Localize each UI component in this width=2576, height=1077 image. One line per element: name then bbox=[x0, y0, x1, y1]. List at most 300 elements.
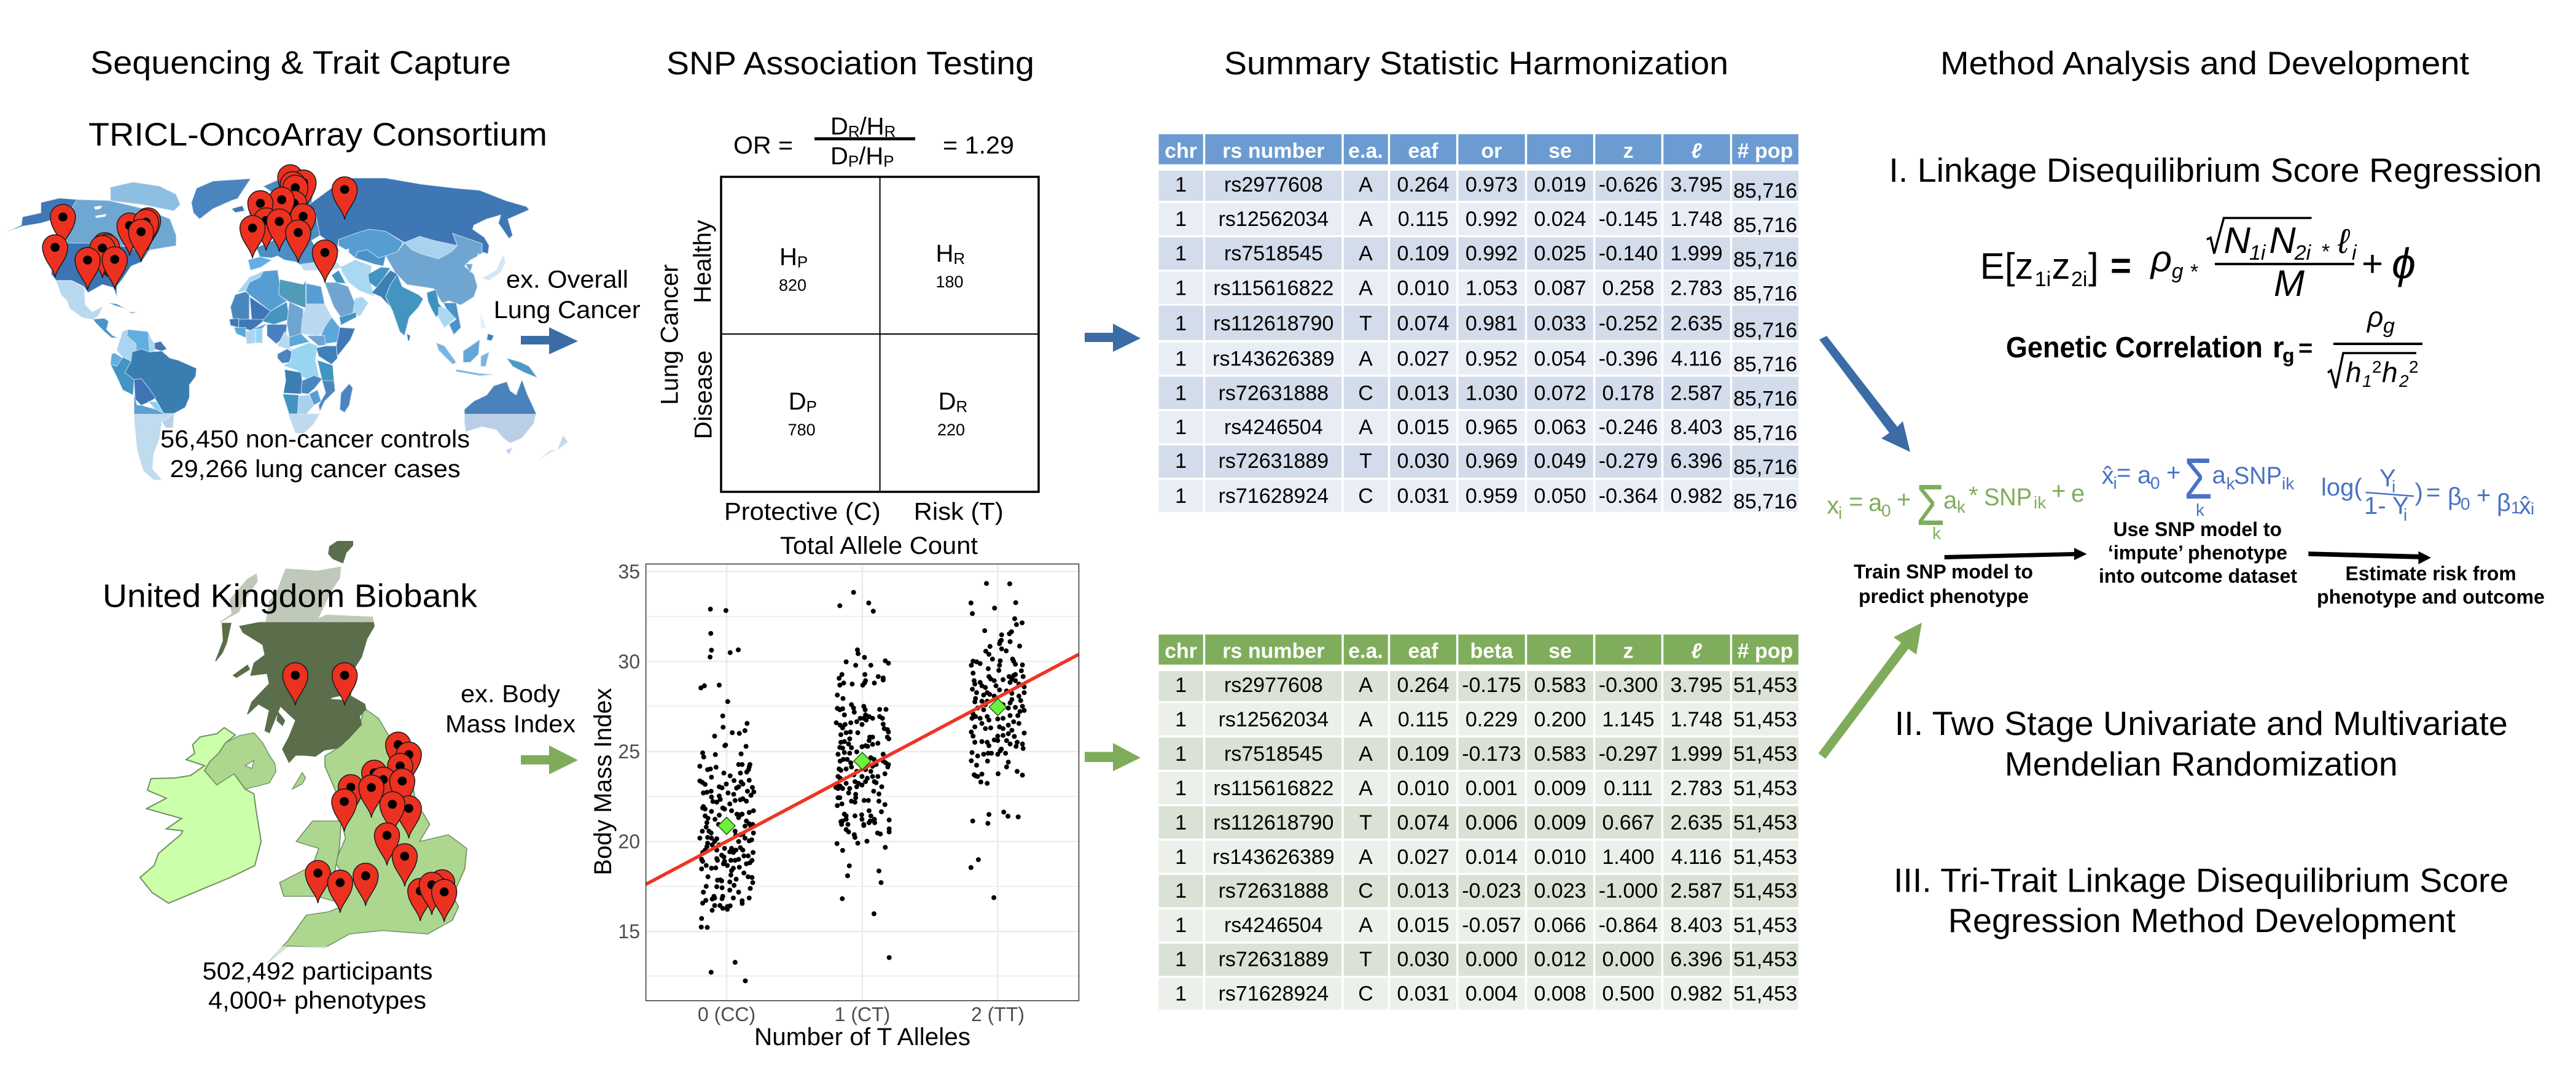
location pins: UK bbox=[283, 663, 457, 922]
row 5: 1 bbox=[1175, 811, 1187, 834]
white text backdrops bbox=[0, 565, 584, 622]
cell: healthy protective: P bbox=[797, 253, 808, 271]
heading: method II bbox=[1895, 704, 2508, 783]
equation: genetic correlation: = bbox=[2298, 335, 2313, 362]
row 8: 0.066 bbox=[1534, 914, 1587, 937]
row 3 bbox=[1175, 242, 1797, 271]
row 9: rs72631889 bbox=[1219, 449, 1329, 473]
row 3: A bbox=[1359, 742, 1373, 766]
equation: genetic correlation: 2 bbox=[2372, 357, 2382, 376]
row 10: C bbox=[1358, 484, 1373, 508]
row 8: -0.057 bbox=[1462, 914, 1521, 937]
row 2: 0.992 bbox=[1466, 208, 1518, 231]
location pins: Europe and Asia bbox=[240, 165, 357, 282]
row 3: 0.992 bbox=[1466, 242, 1518, 265]
heading: Method Analysis and Development: Method Analysis and Development bbox=[1940, 45, 2469, 82]
header row: eaf bbox=[1408, 640, 1438, 663]
row 9: 6.396 bbox=[1670, 948, 1723, 971]
formula: logistic regression: 1- Y bbox=[2364, 492, 2409, 519]
row 4: 2.783 bbox=[1670, 777, 1723, 800]
text: sample counts: 29,266 lung cancer cases bbox=[170, 456, 461, 483]
row 7: 51,453 bbox=[1733, 879, 1797, 903]
row 2: rs12562034 bbox=[1219, 208, 1329, 231]
row 5: 0.667 bbox=[1602, 811, 1655, 834]
formula: logistic regression: x̂ bbox=[2519, 492, 2531, 519]
row 5: 0.074 bbox=[1397, 312, 1450, 335]
equation: genetic correlation: Genetic Correlation bbox=[2006, 332, 2263, 364]
row 5: rs112618790 bbox=[1213, 312, 1333, 335]
text: sample counts bbox=[160, 426, 470, 483]
step text: impute phenotype: ‘impute’ phenotype bbox=[2108, 542, 2287, 564]
row 8: rs4246504 bbox=[1224, 416, 1323, 439]
row 10: rs71628924 bbox=[1219, 982, 1329, 1006]
row 6: 0.054 bbox=[1534, 347, 1587, 370]
formula: imputed phenotype: i bbox=[2113, 473, 2117, 492]
formula: logistic regression: log( bbox=[2321, 474, 2362, 501]
row 5: 0.009 bbox=[1534, 811, 1587, 834]
table: lung cancer summary statistics bbox=[1158, 132, 1798, 513]
row 9: rs72631889 bbox=[1219, 948, 1329, 971]
row 1: 0.583 bbox=[1534, 674, 1587, 697]
row 10 bbox=[1175, 484, 1797, 513]
y axis ticks: 30 bbox=[618, 651, 640, 673]
cell: disease protective: D bbox=[789, 388, 806, 415]
panel: SNP contingency table bbox=[657, 113, 1039, 559]
Africa, Europe, Asia, Oceania bbox=[229, 176, 568, 462]
equation: genetic correlation bbox=[2006, 301, 2422, 391]
heading: method III: Regression Method Development bbox=[1948, 901, 2456, 939]
header row: se bbox=[1548, 640, 1572, 663]
row 10: C bbox=[1358, 982, 1373, 1006]
x axis title: Number of T Alleles bbox=[754, 1024, 970, 1051]
formula: logistic regression: = bbox=[2426, 479, 2440, 506]
row 10: 0.008 bbox=[1534, 982, 1587, 1006]
row 2: 0.200 bbox=[1534, 708, 1587, 731]
row 6 bbox=[1175, 846, 1797, 869]
equation: genetic correlation: ρ bbox=[2366, 301, 2383, 333]
text: participants and phenotypes: 502,492 participants bbox=[203, 958, 432, 985]
formula: logistic regression bbox=[2321, 465, 2534, 524]
heading: Summary Statistic Harmonization: Summary Statistic Harmonization bbox=[1224, 45, 1728, 82]
formula: imputed phenotype: + bbox=[2166, 459, 2180, 486]
row 3: rs7518545 bbox=[1224, 242, 1323, 265]
row 4: 0.010 bbox=[1397, 276, 1450, 300]
odds ratio formula: D bbox=[830, 113, 848, 140]
header row: eaf bbox=[1408, 139, 1438, 163]
row 1: -0.626 bbox=[1599, 173, 1658, 196]
row 7: C bbox=[1358, 381, 1373, 405]
row 5 bbox=[1175, 312, 1797, 342]
text: participants and phenotypes bbox=[203, 958, 432, 1014]
equation: expected z product: * bbox=[2322, 240, 2330, 263]
row 2: 0.024 bbox=[1534, 208, 1587, 231]
row 2: 1.748 bbox=[1670, 708, 1723, 731]
row 5: 0.074 bbox=[1397, 811, 1450, 834]
row 10: 0.031 bbox=[1397, 982, 1450, 1006]
row 2: -0.145 bbox=[1599, 208, 1658, 231]
row 7: 1 bbox=[1175, 879, 1187, 903]
row 10: 85,716 bbox=[1733, 490, 1797, 513]
header row: chr bbox=[1165, 139, 1197, 163]
cell: healthy risk: H bbox=[936, 240, 953, 267]
y axis ticks: 20 bbox=[618, 830, 640, 852]
row 5: 0.006 bbox=[1466, 811, 1518, 834]
row 5: 2.635 bbox=[1670, 811, 1723, 834]
formula: imputed phenotype: a bbox=[2137, 462, 2152, 489]
formula: SNP model bbox=[1827, 473, 2085, 543]
row 4: 0.258 bbox=[1602, 276, 1655, 300]
equation: expected z product: i bbox=[2352, 241, 2357, 265]
row 9: 0.000 bbox=[1602, 948, 1655, 971]
row 8: 8.403 bbox=[1670, 416, 1723, 439]
row 10: 0.982 bbox=[1670, 484, 1723, 508]
equation: expected z product: ℓ bbox=[2337, 222, 2351, 260]
odds ratio formula: /H bbox=[859, 142, 883, 169]
equation: genetic correlation: h bbox=[2382, 356, 2398, 388]
row 6: 51,453 bbox=[1733, 846, 1797, 869]
row 3 bbox=[1175, 742, 1797, 766]
y axis labels bbox=[657, 220, 717, 439]
row 7: 0.178 bbox=[1602, 381, 1655, 405]
row 2: 85,716 bbox=[1733, 214, 1797, 237]
cell: healthy protective bbox=[779, 244, 808, 295]
cell: healthy risk: R bbox=[953, 249, 965, 268]
equation: genetic correlation: r bbox=[2273, 332, 2284, 364]
equation: genetic correlation: 1 bbox=[2362, 371, 2372, 391]
row 6: A bbox=[1359, 347, 1373, 370]
step text: estimate risk: Estimate risk from bbox=[2345, 562, 2516, 585]
header row bbox=[1165, 139, 1793, 163]
row 7 bbox=[1175, 879, 1797, 903]
panel: UK Biobank map bbox=[0, 542, 584, 1014]
England and Wales bbox=[267, 708, 467, 963]
equation: expected z product: * bbox=[2190, 260, 2198, 284]
row 5: 51,453 bbox=[1733, 811, 1797, 834]
formula: logistic regression: 0 bbox=[2461, 494, 2470, 513]
y axis labels: Disease bbox=[690, 351, 717, 439]
text: ex. Overall Lung Cancer: ex. Overall bbox=[506, 266, 628, 294]
row 5: -0.252 bbox=[1599, 312, 1658, 335]
row 8: 51,453 bbox=[1733, 914, 1797, 937]
row 4: 0.010 bbox=[1397, 777, 1450, 800]
row 3: 0.109 bbox=[1397, 742, 1450, 766]
row 9: 1 bbox=[1175, 948, 1187, 971]
heading: United Kingdom Biobank: United Kingdom Biobank bbox=[103, 578, 478, 615]
header row: se bbox=[1548, 139, 1572, 163]
row 7: 1.030 bbox=[1466, 381, 1518, 405]
row 2 bbox=[1175, 708, 1797, 731]
equation: expected z product: M bbox=[2274, 263, 2305, 304]
row 4: rs115616822 bbox=[1213, 777, 1333, 800]
y axis ticks: 15 bbox=[618, 920, 640, 943]
heading: method II: Mendelian Randomization bbox=[2005, 745, 2398, 783]
formula: SNP model: k bbox=[1932, 524, 1942, 543]
white arrow label backdrop bbox=[477, 254, 649, 330]
row 9: 0.030 bbox=[1397, 948, 1450, 971]
header row bbox=[1165, 640, 1793, 663]
row 3: -0.297 bbox=[1599, 742, 1658, 766]
equation: expected z product: z bbox=[2051, 246, 2070, 287]
header row: # pop bbox=[1738, 640, 1793, 663]
row 6: 4.116 bbox=[1671, 846, 1722, 869]
heading: TRICL-OncoArray Consortium: TRICL-OncoArray Consortium bbox=[88, 117, 547, 153]
formula: logistic regression: Y bbox=[2379, 465, 2396, 492]
row 8 bbox=[1175, 416, 1797, 445]
cell: disease risk: R bbox=[956, 397, 967, 416]
arrow: UK map to scatter plot bbox=[521, 745, 578, 774]
row 3: 0.583 bbox=[1534, 742, 1587, 766]
header row: z bbox=[1623, 139, 1634, 163]
row 4: 0.111 bbox=[1604, 777, 1653, 800]
row 5: rs112618790 bbox=[1213, 811, 1333, 834]
row 8: 1 bbox=[1175, 914, 1187, 937]
row 2: 1.145 bbox=[1602, 708, 1655, 731]
arrow: train to impute bbox=[1945, 548, 2087, 560]
row 10 bbox=[1175, 982, 1797, 1006]
row 1: 0.019 bbox=[1534, 173, 1587, 196]
Republic of Ireland bbox=[140, 728, 261, 903]
row 6: 0.027 bbox=[1397, 846, 1450, 869]
row 7: -0.023 bbox=[1462, 879, 1521, 903]
y axis labels: Healthy bbox=[689, 220, 716, 303]
table cell backgrounds bbox=[1158, 132, 1798, 513]
row 5: 0.981 bbox=[1466, 312, 1518, 335]
formula: SNP model: Σ bbox=[1916, 473, 1945, 538]
row 3: 1.999 bbox=[1670, 742, 1723, 766]
row 4 bbox=[1175, 276, 1797, 306]
equation: genetic correlation: g bbox=[2282, 344, 2295, 367]
header row: e.a. bbox=[1348, 139, 1383, 163]
row 9 bbox=[1175, 449, 1797, 479]
row 1: A bbox=[1359, 173, 1373, 196]
row 1: 85,716 bbox=[1733, 179, 1797, 203]
row 6: rs143626389 bbox=[1212, 846, 1335, 869]
panel: TRICL-OncoArray world map bbox=[0, 117, 649, 583]
heading: SNP Association Testing: SNP Association Testing bbox=[666, 45, 1034, 82]
header row: # pop bbox=[1738, 139, 1793, 163]
header row: chr bbox=[1165, 640, 1197, 663]
equation: expected z product: ] bbox=[2088, 246, 2099, 287]
row 4: A bbox=[1359, 777, 1373, 800]
location pins: North America bbox=[42, 204, 161, 290]
row 5: T bbox=[1359, 811, 1372, 834]
formula: logistic regression: i bbox=[2403, 505, 2407, 524]
header row: ℓ bbox=[1691, 640, 1702, 663]
odds ratio formula: OR = bbox=[733, 132, 793, 159]
equation: genetic correlation: h bbox=[2346, 356, 2362, 388]
row 9: 0.000 bbox=[1466, 948, 1518, 971]
row 6: 1.400 bbox=[1602, 846, 1655, 869]
equation: expected z product: N bbox=[2269, 220, 2296, 261]
formula: SNP model: + bbox=[2051, 478, 2066, 505]
row 7 bbox=[1175, 381, 1797, 410]
row 7: 85,716 bbox=[1733, 387, 1797, 410]
row 4: A bbox=[1359, 276, 1373, 300]
row 3: 0.025 bbox=[1534, 242, 1587, 265]
row 10: 0.031 bbox=[1397, 484, 1450, 508]
cell: disease risk: D bbox=[939, 388, 956, 415]
row 6: rs143626389 bbox=[1212, 347, 1335, 370]
row 1: 0.973 bbox=[1466, 173, 1518, 196]
x axis ticks: 1 (CT) bbox=[835, 1003, 890, 1025]
formula: imputed phenotype: k bbox=[2227, 474, 2236, 493]
x axis labels bbox=[724, 499, 1004, 559]
formula: logistic regression: i bbox=[2392, 477, 2395, 496]
row 5 bbox=[1175, 811, 1797, 834]
row 9: 0.049 bbox=[1534, 449, 1587, 473]
formula: imputed phenotype: ik bbox=[2282, 474, 2295, 493]
row 9: 0.030 bbox=[1397, 449, 1450, 473]
formula: logistic regression: + bbox=[2476, 482, 2491, 509]
row 7: -1.000 bbox=[1599, 879, 1658, 903]
row 8: 0.015 bbox=[1397, 914, 1450, 937]
row 10: rs71628924 bbox=[1219, 484, 1329, 508]
row 8: -0.246 bbox=[1599, 416, 1658, 439]
row 3: 1.999 bbox=[1670, 242, 1723, 265]
y axis ticks bbox=[618, 561, 640, 943]
text: ex. Body Mass Index: ex. Body bbox=[461, 681, 560, 708]
Northern Ireland, Scotland and islands bbox=[205, 542, 374, 789]
odds ratio formula: = 1.29 bbox=[943, 132, 1014, 159]
equation: genetic correlation: 2 bbox=[2398, 371, 2409, 391]
row 4: 0.001 bbox=[1466, 777, 1518, 800]
formula: SNP model: 0 bbox=[1881, 501, 1891, 520]
row 1: -0.300 bbox=[1599, 674, 1658, 697]
header row: or bbox=[1481, 139, 1502, 163]
row 4: 1 bbox=[1175, 276, 1187, 300]
formula: imputed phenotype: Σ bbox=[2184, 446, 2212, 511]
row 1: rs2977608 bbox=[1224, 674, 1323, 697]
row 3: -0.140 bbox=[1599, 242, 1658, 265]
row 5: T bbox=[1359, 312, 1372, 335]
heading: method III: III. Tri-Trait Linkage Disequilibrium Score bbox=[1894, 861, 2508, 899]
row 2: 1 bbox=[1175, 708, 1187, 731]
row 9: 0.969 bbox=[1466, 449, 1518, 473]
row 6: 0.014 bbox=[1466, 846, 1518, 869]
row 2: 51,453 bbox=[1733, 708, 1797, 731]
arrow: blue table to methods bbox=[1819, 336, 1910, 452]
heading: method II: II. Two Stage Univariate and Multivariate bbox=[1895, 704, 2508, 742]
row 9: 1 bbox=[1175, 449, 1187, 473]
formula: imputed phenotype bbox=[2102, 446, 2295, 519]
scatter points bbox=[700, 583, 1025, 981]
row 6: 0.952 bbox=[1466, 347, 1518, 370]
header row: beta bbox=[1470, 640, 1513, 663]
row 7: rs72631888 bbox=[1219, 879, 1329, 903]
header row: rs number bbox=[1222, 640, 1325, 663]
arrow: impute to estimate bbox=[2308, 551, 2431, 564]
row 8: -0.864 bbox=[1599, 914, 1658, 937]
step text: train model: Train SNP model to bbox=[1854, 561, 2033, 583]
step text: train model bbox=[1854, 561, 2033, 607]
row 4: 0.009 bbox=[1534, 777, 1587, 800]
row 8: 0.063 bbox=[1534, 416, 1587, 439]
row 5: 2.635 bbox=[1670, 312, 1723, 335]
arrow: scatter to green table bbox=[1085, 743, 1141, 771]
row 3: 0.109 bbox=[1397, 242, 1450, 265]
equation: expected z product: ϕ bbox=[2392, 239, 2416, 287]
row 2: 0.229 bbox=[1466, 708, 1518, 731]
formula: logistic regression: ) bbox=[2415, 479, 2423, 506]
y axis title: Body Mass Index bbox=[590, 688, 617, 876]
row 8: rs4246504 bbox=[1224, 914, 1323, 937]
row 8: 8.403 bbox=[1670, 914, 1723, 937]
row 7: 2.587 bbox=[1670, 381, 1723, 405]
formula: SNP model: ik bbox=[2034, 493, 2047, 512]
header row: ℓ bbox=[1691, 139, 1702, 163]
row 7: 2.587 bbox=[1670, 879, 1723, 903]
formula: imputed phenotype: SNP bbox=[2234, 462, 2282, 489]
row 4 bbox=[1175, 777, 1797, 800]
mean diamonds bbox=[718, 699, 1006, 834]
plot frame bbox=[646, 564, 1079, 1001]
regression line bbox=[646, 655, 1079, 884]
equation: genetic correlation: 2 bbox=[2409, 357, 2419, 376]
formula: logistic regression: β bbox=[2497, 489, 2511, 516]
odds ratio formula: D bbox=[830, 142, 848, 169]
row 3: -0.173 bbox=[1462, 742, 1521, 766]
row 5: 1 bbox=[1175, 312, 1187, 335]
formula: imputed phenotype: x̂ bbox=[2102, 462, 2114, 489]
Americas bbox=[7, 179, 251, 480]
row 2: A bbox=[1359, 708, 1373, 731]
y axis labels: Lung Cancer bbox=[657, 264, 684, 405]
text: ex. Body Mass Index bbox=[445, 681, 576, 738]
row 1: -0.175 bbox=[1462, 674, 1521, 697]
row 7: 0.072 bbox=[1534, 381, 1587, 405]
step text: estimate risk bbox=[2317, 562, 2545, 608]
text: sample counts: 56,450 non-cancer controls bbox=[160, 426, 470, 453]
panel: method I LD score regression bbox=[1889, 151, 2542, 391]
equation: expected z product: 1i bbox=[2249, 241, 2266, 265]
row 8: A bbox=[1359, 416, 1373, 439]
row 10: 0.500 bbox=[1602, 982, 1655, 1006]
heading: I. Linkage Disequilibrium Score Regression: I. Linkage Disequilibrium Score Regression bbox=[1889, 151, 2542, 189]
row 10: 0.050 bbox=[1534, 484, 1587, 508]
cell: disease protective: 780 bbox=[788, 421, 816, 439]
formula: SNP model: * bbox=[1969, 482, 1978, 509]
formula: SNP model: + bbox=[1897, 486, 1911, 513]
row 6: 0.010 bbox=[1534, 846, 1587, 869]
equation: expected z product: 2i bbox=[2294, 241, 2312, 265]
row 10: 0.982 bbox=[1670, 982, 1723, 1006]
arrow: contingency to blue table bbox=[1085, 324, 1141, 352]
header row: z bbox=[1623, 640, 1634, 663]
equation: expected z product: ρ bbox=[2150, 238, 2172, 279]
row 9: T bbox=[1359, 948, 1372, 971]
row 8: 0.965 bbox=[1466, 416, 1518, 439]
row 2: 0.115 bbox=[1398, 708, 1448, 731]
row 4: 1.053 bbox=[1466, 276, 1518, 300]
row 1: 51,453 bbox=[1733, 674, 1797, 697]
row 7: 0.023 bbox=[1534, 879, 1587, 903]
formula: SNP model: k bbox=[1957, 497, 1966, 516]
row 10: 1 bbox=[1175, 982, 1187, 1006]
row 9: 85,716 bbox=[1733, 456, 1797, 479]
row 1: 1 bbox=[1175, 173, 1187, 196]
row 6 bbox=[1175, 347, 1797, 376]
row 7: rs72631888 bbox=[1219, 381, 1329, 405]
row 6: 1 bbox=[1175, 846, 1187, 869]
formula: logistic regression: β bbox=[2448, 483, 2462, 510]
row 10: 0.959 bbox=[1466, 484, 1518, 508]
text: ex. Body Mass Index: Mass Index bbox=[445, 711, 576, 738]
header row: rs number bbox=[1222, 139, 1325, 163]
cell: disease protective: P bbox=[806, 397, 817, 416]
step text: estimate risk: phenotype and outcome bbox=[2317, 586, 2545, 608]
row 9 bbox=[1175, 948, 1797, 971]
y axis ticks: 25 bbox=[618, 741, 640, 763]
